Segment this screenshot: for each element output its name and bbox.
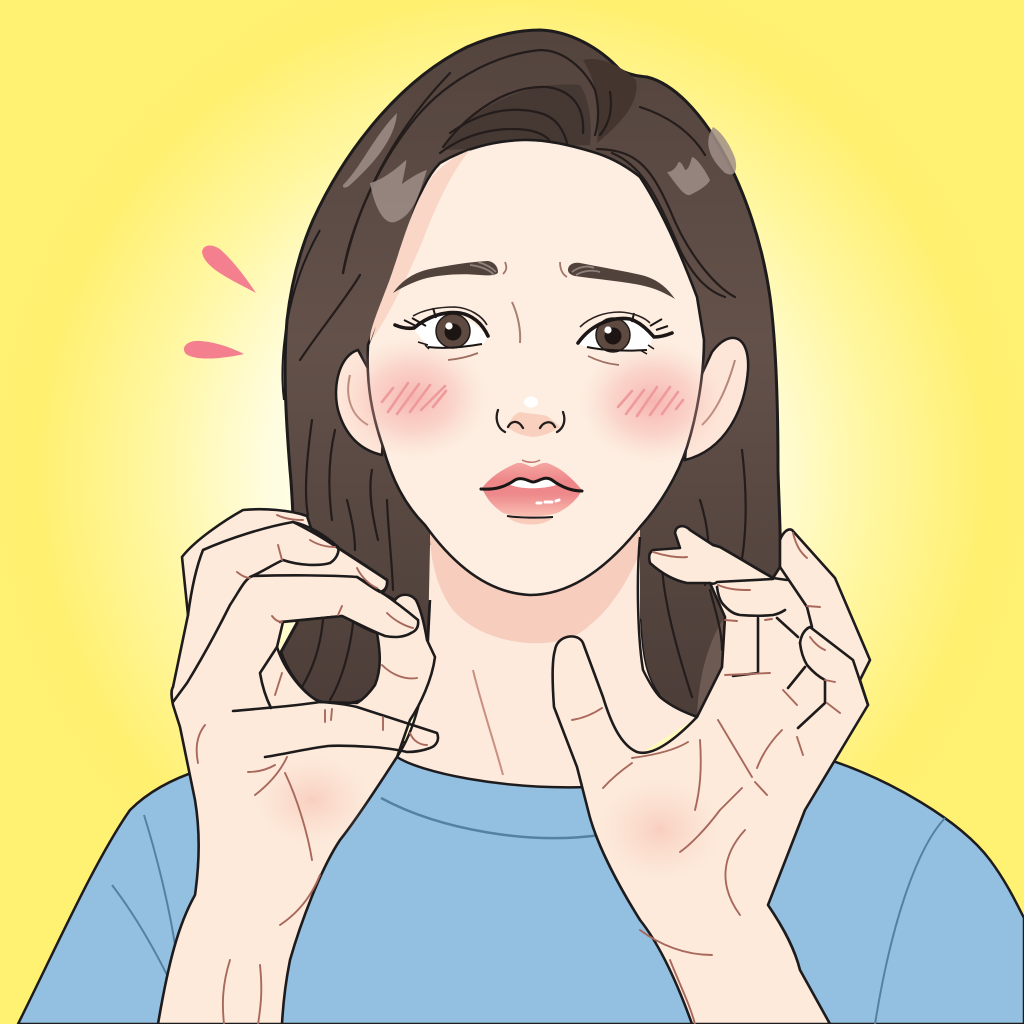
nose: [497, 396, 564, 437]
hair: dark crown area: [443, 84, 591, 150]
hand blush: [598, 778, 722, 882]
eye: left: [395, 307, 488, 360]
hair: lighter strand: [697, 617, 725, 717]
hand silhouette: [553, 526, 870, 1024]
blush hatching: [382, 383, 683, 416]
hand: right: [553, 526, 870, 1024]
hair: back mass: [281, 30, 780, 717]
icon: pink alarm marks: [184, 246, 256, 359]
finger outlines: [173, 522, 438, 757]
hair: parting swirl: [583, 59, 637, 143]
ear: left: [336, 350, 385, 455]
cheek blush: left: [337, 336, 489, 460]
cheek blush: right: [579, 340, 727, 464]
shirt: [18, 740, 1024, 1024]
lips: [481, 460, 582, 525]
knuckle and vein lines: [197, 515, 427, 1024]
eye: right: [578, 312, 672, 365]
frown line: [512, 302, 520, 343]
hair shine highlights: [343, 113, 736, 222]
forehead shadow at hairline: [370, 150, 470, 342]
hand silhouette with gap between fingers: [158, 509, 435, 1024]
ear: right: [685, 338, 748, 460]
hand: left: [158, 509, 438, 1024]
crease and vein lines: [572, 533, 840, 1024]
eyebrow: left: [393, 261, 506, 293]
neck: [397, 520, 697, 787]
hand blush: [254, 755, 370, 845]
finger outlines: [710, 545, 868, 728]
face: [337, 140, 727, 595]
eyebrow: right: [560, 262, 675, 299]
